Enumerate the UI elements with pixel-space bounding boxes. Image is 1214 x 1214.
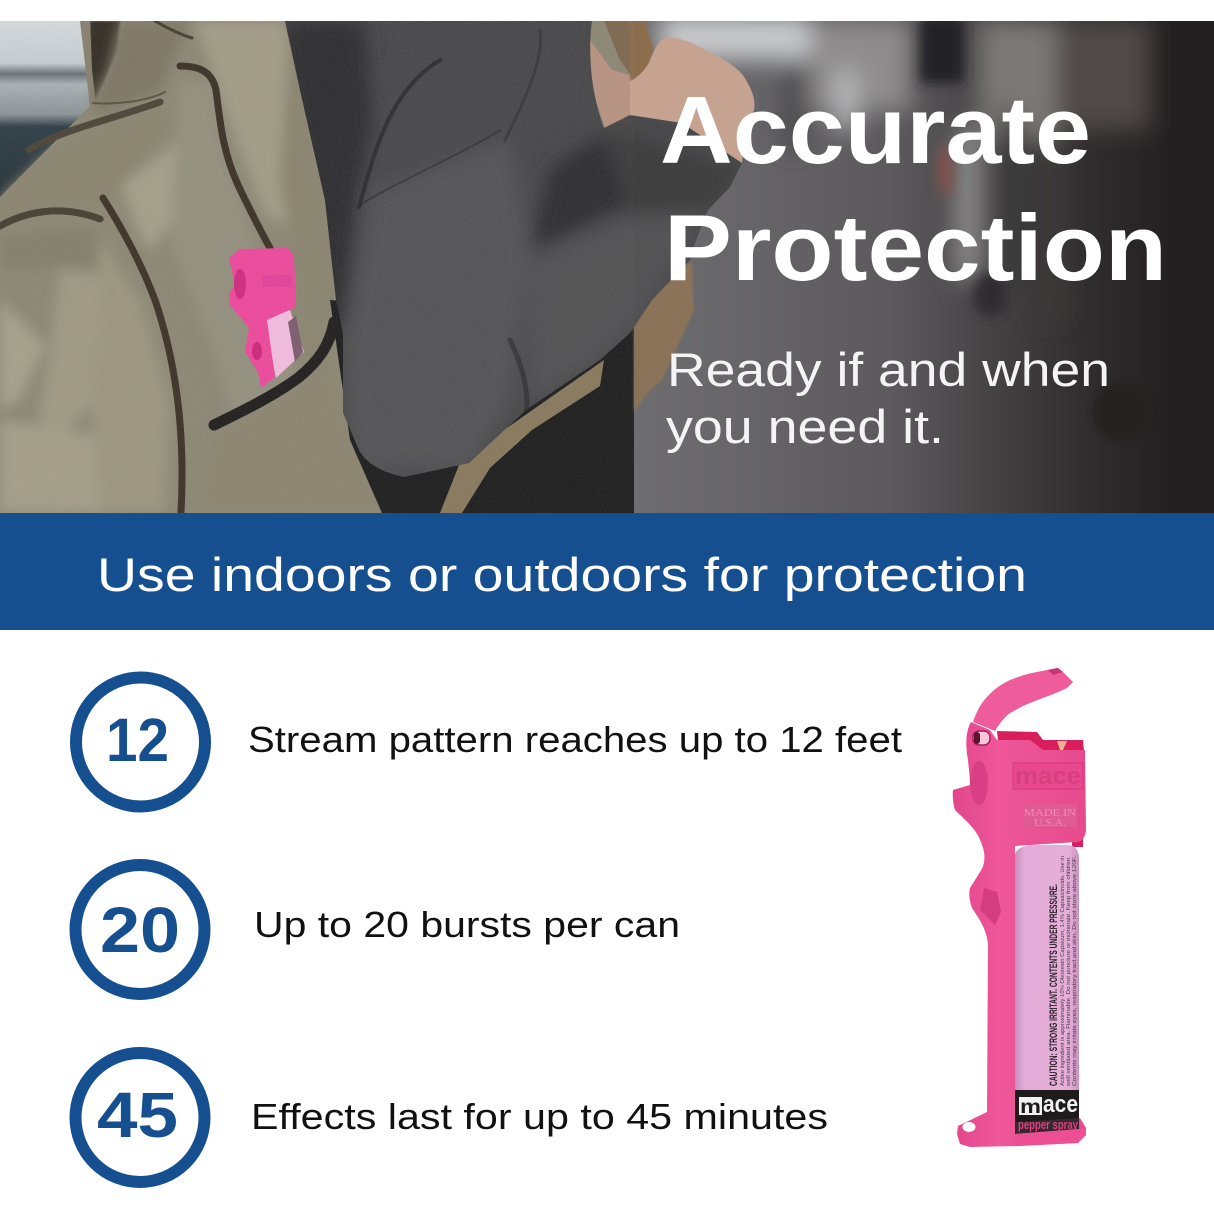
hair	[630, 21, 694, 412]
black label	[1015, 1090, 1079, 1134]
feature 45 minutes	[76, 1053, 828, 1182]
heading line 1: Accurate	[660, 77, 1091, 184]
subheading	[666, 343, 1110, 453]
product: pink pepper spray	[953, 668, 1086, 1147]
embossed made in USA: MADE IN	[1024, 807, 1076, 819]
badge 12: 12	[106, 706, 169, 774]
badge 20: 20	[100, 894, 180, 966]
dark torso	[330, 300, 640, 513]
black pocket band	[214, 322, 334, 425]
blurred dark object	[1093, 385, 1124, 439]
hand	[630, 37, 755, 163]
pink body and grip	[953, 722, 1086, 1147]
heading line 2: Protection	[664, 195, 1167, 300]
pepper spray on label: pepper spray	[1018, 1117, 1079, 1132]
subheading line 1: Ready if and when	[667, 343, 1110, 396]
subheading line 2: you need it.	[666, 400, 944, 453]
feature 12 feet	[76, 678, 902, 806]
feature text 12: Stream pattern reaches up to 12 feet	[248, 719, 902, 760]
fabric noise texture	[0, 21, 634, 513]
badge 45	[76, 1053, 204, 1182]
backpack handle	[90, 21, 120, 102]
zippers	[0, 21, 270, 512]
red collar detail	[1072, 836, 1083, 847]
embossed brand: mace	[1015, 763, 1081, 790]
red inner housing	[997, 731, 1084, 760]
heading	[660, 77, 1167, 300]
hero photo: backpack and street	[0, 15, 1214, 513]
embossed made in USA	[1023, 804, 1077, 829]
pink base lip	[1015, 1128, 1086, 1146]
feature text 45: Effects last for up to 45 minutes	[251, 1096, 828, 1137]
tan shoulder strap	[440, 360, 604, 513]
open cap	[973, 668, 1073, 731]
sweater folds	[359, 30, 541, 420]
backpack	[0, 21, 640, 513]
skin at wrist	[590, 40, 634, 128]
caution text: CAUTION: STRONG IRRITANT. CONTENTS UNDER PRESSURE.	[1048, 884, 1060, 1086]
banner text: Use indoors or outdoors for protection	[97, 548, 1027, 601]
mace logo on label: ace	[1043, 1091, 1078, 1118]
fabric light and dark panels	[0, 21, 291, 513]
badge 12	[76, 678, 205, 806]
finger hole lower	[980, 888, 1001, 925]
lilac canister	[1015, 845, 1079, 1090]
feature text 20: Up to 20 bursts per can	[254, 904, 680, 945]
street background	[634, 15, 1214, 513]
mace logo on label: m	[1020, 1097, 1041, 1118]
badge 20	[76, 865, 204, 994]
blurred sky behind pack	[0, 21, 92, 197]
caution text: Contents may irritate eyes, respiratory tract and skin. Do not store above 120F.	[1072, 856, 1078, 1086]
pink sprayer in pocket	[229, 248, 304, 388]
mace logo on label	[1019, 1091, 1078, 1118]
caution text: Active ingredient is approximately 10% Oleoresin Capsicum, 1.4% Capsaicinoids. Use in	[1060, 856, 1066, 1086]
embossed made in USA: U.S.A.	[1034, 817, 1066, 829]
hinge slot	[973, 731, 990, 745]
finger hole upper	[970, 761, 988, 805]
caution text	[1048, 856, 1078, 1086]
grey sweater	[280, 15, 760, 495]
caution text: well ventilated area. Flammable. Do not puncture or incinerate. Keep from children.	[1066, 856, 1072, 1086]
keyring hole	[962, 1122, 976, 1132]
blue banner	[0, 513, 1214, 630]
badge 45: 45	[97, 1079, 178, 1151]
feature 20 bursts	[76, 865, 680, 994]
bag strap at top	[604, 21, 634, 74]
